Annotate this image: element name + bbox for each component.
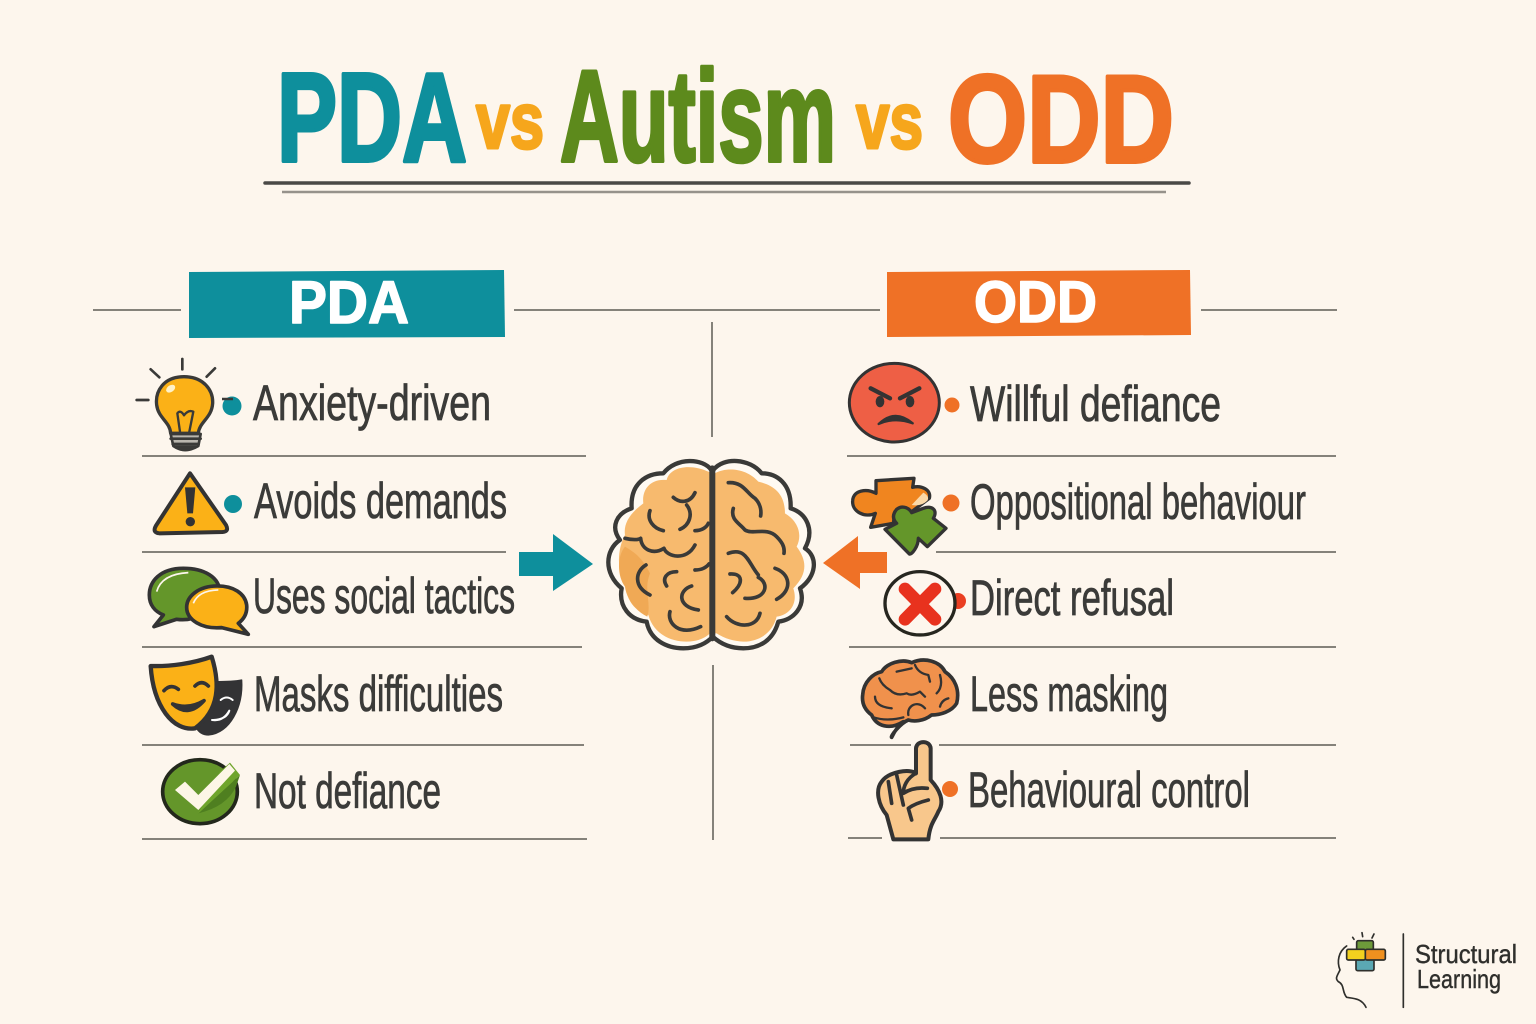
text: Direct refusal: Direct refusal bbox=[970, 570, 1174, 626]
title: ODD bbox=[948, 51, 1174, 189]
panel header: PDA bbox=[189, 269, 505, 338]
dash near bulb bbox=[222, 398, 233, 400]
bullet: teal dot 2 bbox=[224, 495, 242, 513]
bullet: red dot 3 bbox=[950, 593, 966, 609]
panel header: ODD bbox=[887, 270, 1191, 337]
panel header: PDA: PDA bbox=[289, 269, 409, 336]
text: Not defiance: Not defiance bbox=[254, 763, 441, 819]
icon: hand pointing up bbox=[878, 742, 941, 839]
bullet: orange dot 2 bbox=[942, 494, 960, 512]
panel header: ODD: ODD bbox=[974, 270, 1097, 335]
text: Less masking: Less masking bbox=[970, 666, 1168, 722]
bullet: orange dot 1 bbox=[944, 398, 960, 412]
title bbox=[277, 43, 1174, 189]
bullet: teal dot 1 bbox=[222, 396, 242, 416]
icon: light bulb bbox=[137, 359, 215, 450]
arrow: teal pointing right bbox=[519, 534, 593, 591]
icon: side-view brain bbox=[862, 660, 958, 737]
logo: Structural Learning: Learning bbox=[1417, 964, 1501, 994]
central brain illustration bbox=[608, 461, 814, 648]
logo: Structural Learning bbox=[1337, 933, 1517, 1007]
text: Behavioural control: Behavioural control bbox=[968, 762, 1250, 818]
text: Uses social tactics: Uses social tactics bbox=[253, 568, 515, 624]
icon: warning triangle bbox=[155, 473, 227, 533]
title: vs bbox=[856, 76, 923, 165]
icon: speech bubbles bbox=[149, 568, 248, 634]
arrow: orange pointing left bbox=[823, 536, 887, 589]
text: Masks difficulties: Masks difficulties bbox=[254, 666, 503, 722]
icon: theatre masks bbox=[151, 657, 242, 735]
bullet: orange dot 5 bbox=[942, 781, 958, 797]
icon: check mark bbox=[163, 760, 240, 824]
title: vs bbox=[476, 76, 544, 165]
text: Avoids demands: Avoids demands bbox=[254, 473, 507, 529]
icon: red cross in circle bbox=[885, 572, 955, 635]
icon: puzzle pieces bbox=[853, 478, 946, 554]
title: Autism bbox=[560, 43, 836, 189]
text: Oppositional behaviour: Oppositional behaviour bbox=[970, 474, 1306, 530]
text: Anxiety-driven: Anxiety-driven bbox=[253, 375, 491, 431]
icon: angry face bbox=[849, 363, 939, 442]
text: Willful defiance: Willful defiance bbox=[970, 376, 1221, 432]
logo: Structural Learning: Structural bbox=[1415, 939, 1517, 969]
title: PDA bbox=[277, 47, 467, 188]
